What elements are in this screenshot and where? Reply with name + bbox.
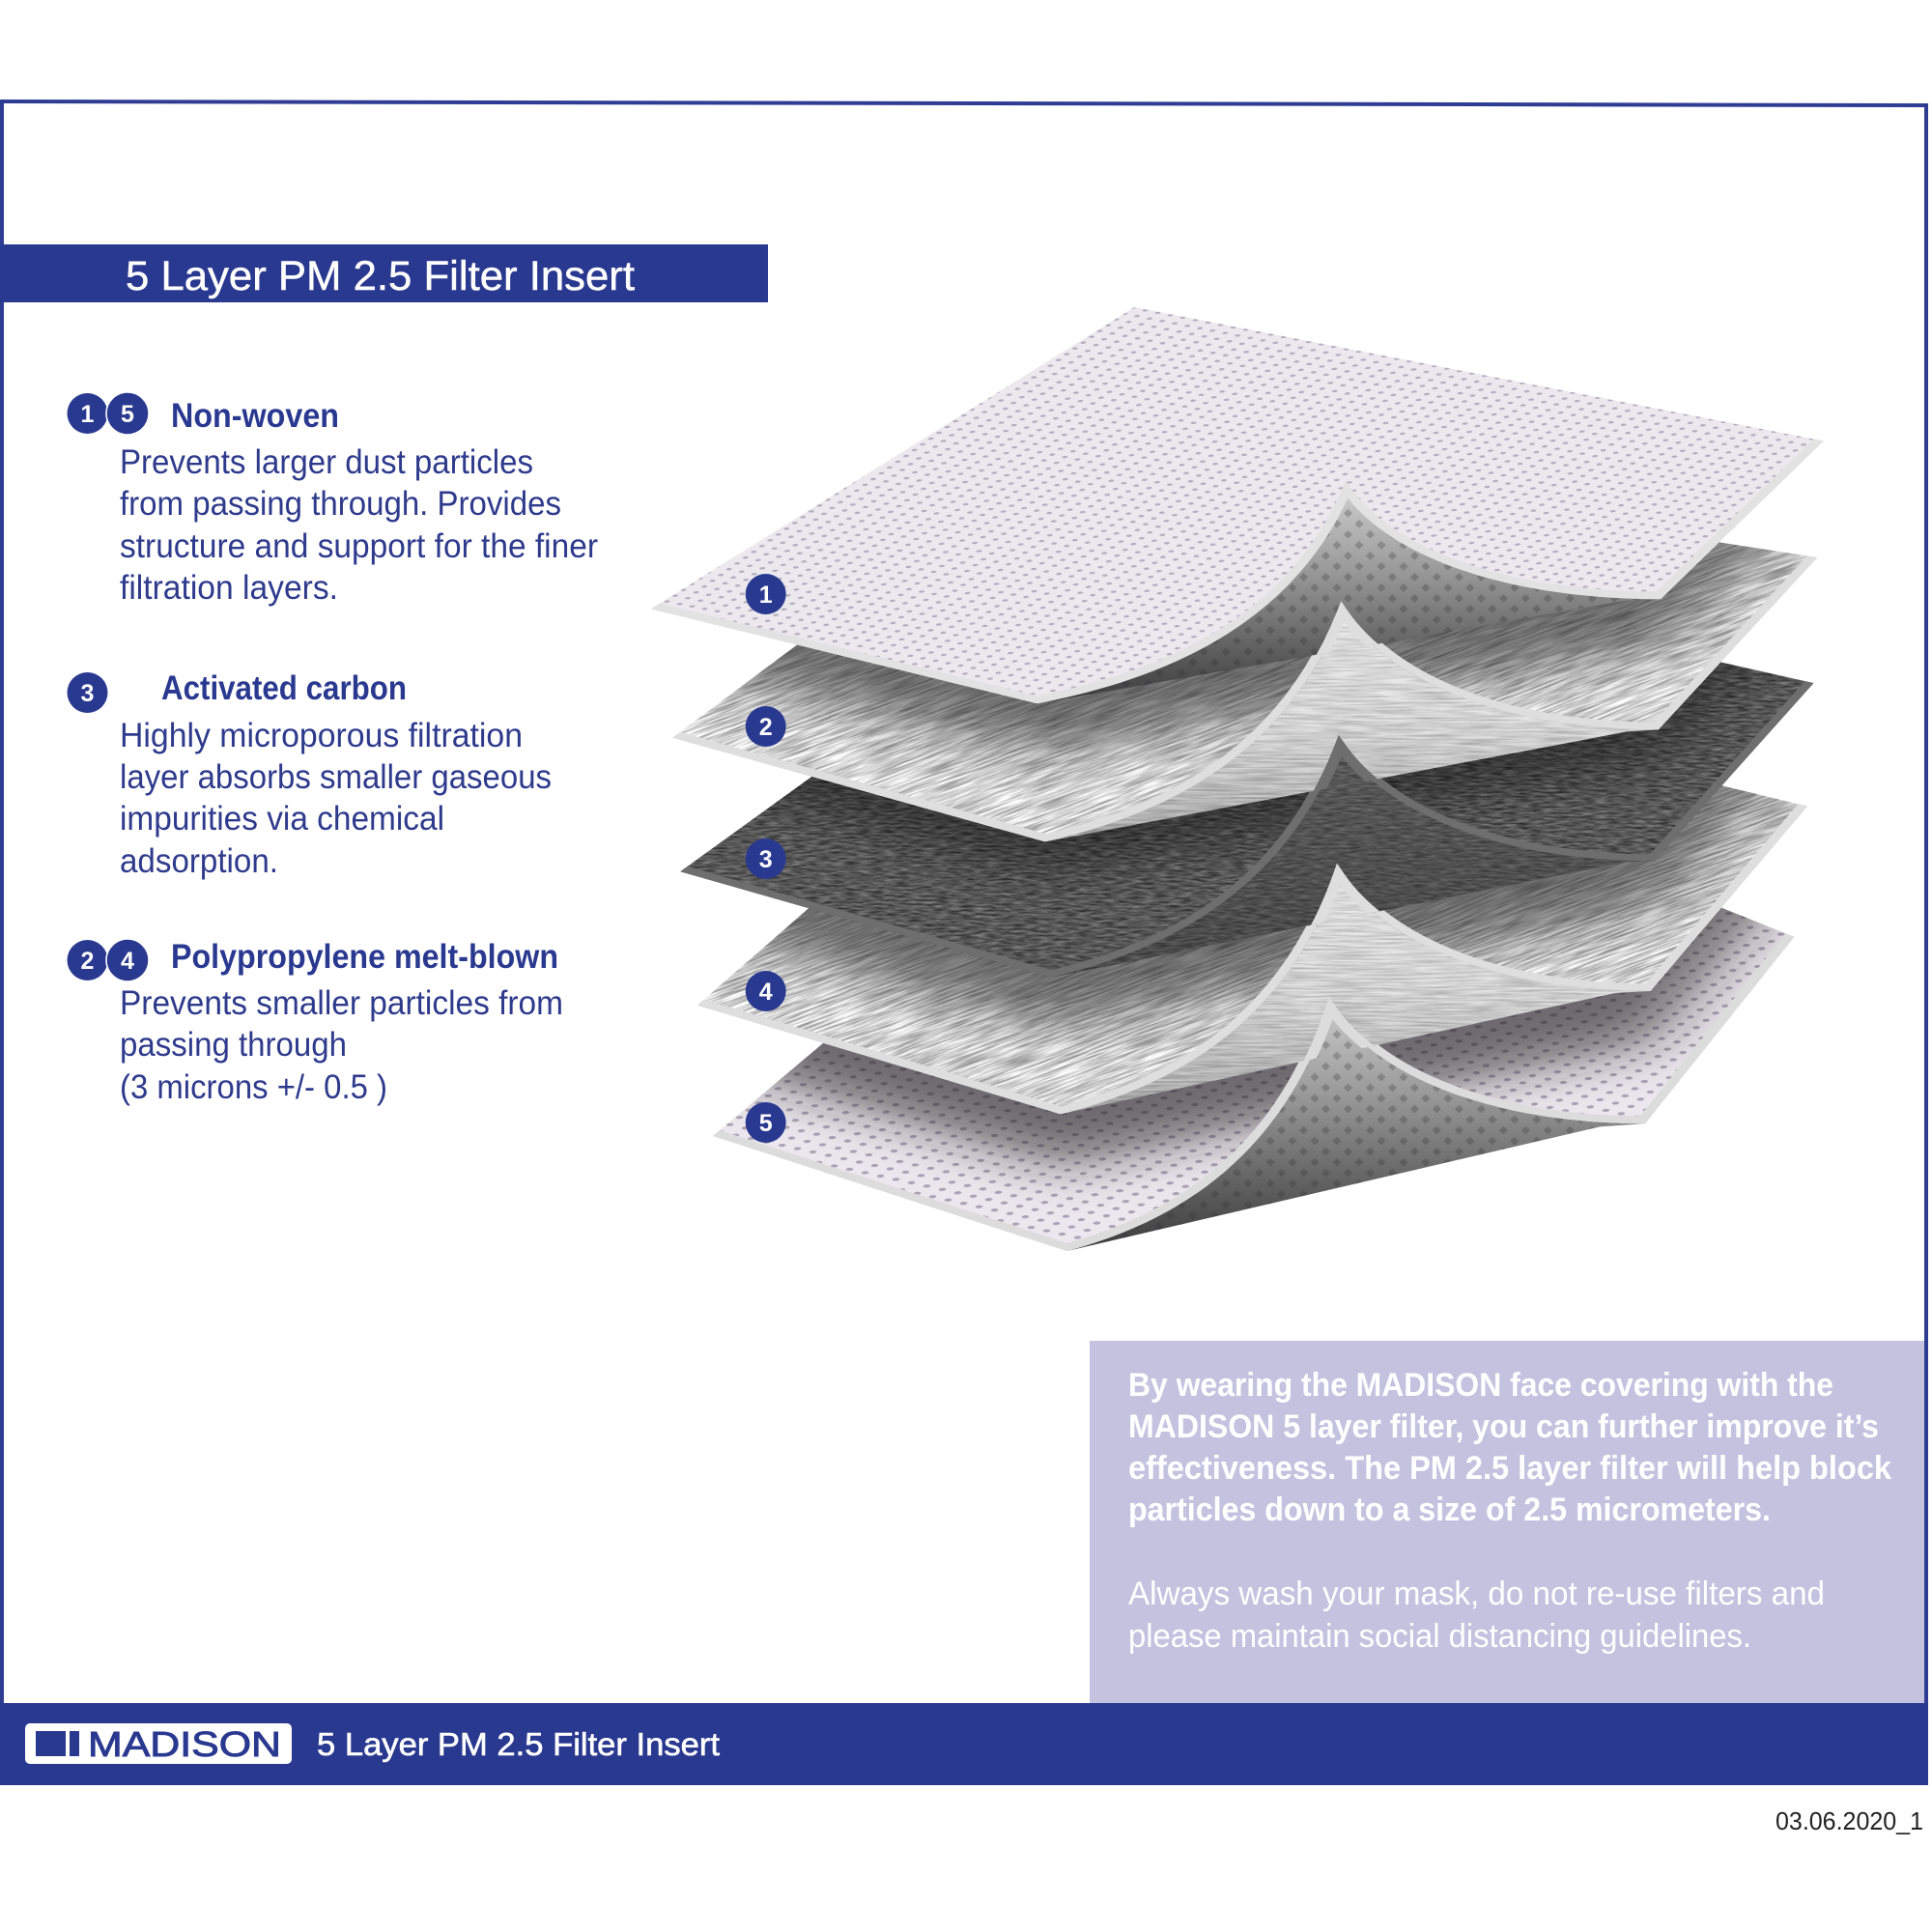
layer number badges: 2 bbox=[759, 714, 773, 741]
callout panel: By wearing the MADISON face covering with the bbox=[1128, 1367, 1833, 1404]
layer number badges: 1 bbox=[759, 582, 773, 609]
section: non-woven: from passing through. Provides bbox=[120, 485, 561, 523]
badges 2 and 4: 2 bbox=[81, 948, 94, 975]
layer 5 sheet bbox=[713, 908, 1795, 1251]
badges 1 and 5: 1 bbox=[81, 401, 95, 428]
section: activated carbon: layer absorbs smaller gaseous bbox=[120, 758, 552, 796]
callout panel: MADISON 5 layer filter, you can further improve it’s bbox=[1128, 1408, 1879, 1445]
section: activated carbon: impurities via chemical bbox=[120, 800, 444, 838]
layer 2 sheet bbox=[672, 498, 1818, 842]
badges 1 and 5 bbox=[68, 392, 149, 435]
title banner: 5 Layer PM 2.5 Filter Insert bbox=[126, 253, 635, 299]
badges 1 and 5: 5 bbox=[121, 401, 134, 428]
layer number badges: 5 bbox=[759, 1110, 773, 1137]
footer bar bbox=[0, 1703, 1928, 1785]
logo: MADISON: MADISON bbox=[88, 1724, 281, 1764]
layer 1 sheet with peak of layer 2 over its underside bbox=[651, 307, 1824, 703]
layer number badges: 4 bbox=[759, 979, 773, 1006]
section: activated carbon: Activated carbon bbox=[161, 669, 407, 707]
peak of layer 4 over layer 3 underside bbox=[1311, 864, 1379, 925]
section: non-woven: filtration layers. bbox=[120, 569, 338, 607]
layer 4 sheet bbox=[697, 785, 1807, 1115]
section: polypropylene melt-blown: (3 microns +/- 0.5 ) bbox=[120, 1068, 387, 1106]
footer bar: 5 Layer PM 2.5 Filter Insert bbox=[317, 1726, 720, 1762]
layer number badges: 3 bbox=[759, 846, 773, 873]
section: activated carbon: Highly microporous filtration bbox=[120, 717, 523, 754]
section: non-woven: Non-woven bbox=[171, 397, 339, 435]
layer 3 activated carbon sheet bbox=[680, 645, 1814, 978]
badge 3: 3 bbox=[81, 680, 94, 707]
peak of layer 5 over layer 4 underside bbox=[1304, 997, 1374, 1061]
section: non-woven: structure and support for the finer bbox=[120, 527, 598, 565]
callout panel: particles down to a size of 2.5 micrometers. bbox=[1128, 1492, 1771, 1528]
logo: MADISON bbox=[25, 1723, 292, 1764]
callout panel: effectiveness. The PM 2.5 layer filter will help block bbox=[1128, 1450, 1891, 1487]
section: activated carbon bbox=[68, 669, 552, 880]
date code: 03.06.2020_1 bbox=[1776, 1806, 1923, 1835]
section: non-woven bbox=[68, 392, 598, 607]
callout panel: Always wash your mask, do not re-use filters and bbox=[1128, 1576, 1825, 1612]
layer number badges bbox=[746, 574, 786, 1143]
peak of layer 3 over layer 2 underside bbox=[1314, 734, 1378, 791]
badges 2 and 4 bbox=[68, 939, 149, 981]
section: polypropylene melt-blown bbox=[68, 938, 563, 1106]
section: polypropylene melt-blown: Polypropylene melt-blown bbox=[171, 938, 558, 976]
callout panel: please maintain social distancing guidelines. bbox=[1128, 1618, 1751, 1655]
section: polypropylene melt-blown: Prevents smaller particles from bbox=[120, 984, 563, 1022]
badges 2 and 4: 4 bbox=[121, 948, 134, 975]
section: polypropylene melt-blown: passing through bbox=[120, 1026, 347, 1064]
callout panel bbox=[1090, 1341, 1924, 1703]
title banner bbox=[0, 244, 768, 302]
section: activated carbon: adsorption. bbox=[120, 842, 278, 880]
section: non-woven: Prevents larger dust particles bbox=[120, 443, 533, 481]
badge 3 bbox=[68, 672, 108, 713]
exploded filter layers illustration bbox=[651, 307, 1824, 1251]
